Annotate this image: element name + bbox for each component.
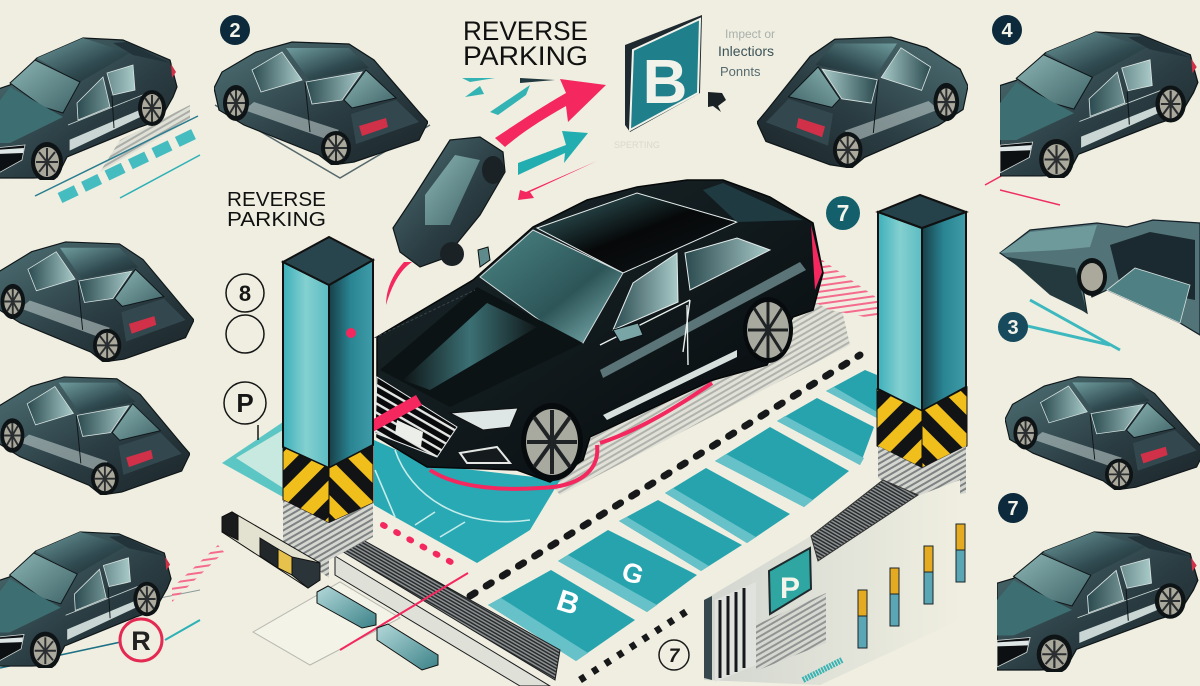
car: bottom left [0,532,171,670]
number badge 7 right [998,493,1028,523]
number badge 7 right: 7 [1007,498,1019,520]
flying small car [393,137,505,267]
red line across curb [340,573,468,650]
roof [537,193,737,273]
inspection text: Ponnts [720,64,761,79]
inspection text [718,27,775,79]
car: left second [0,242,194,362]
license plate [395,420,423,447]
teal floor [374,440,560,563]
car: top right of centre [757,37,968,168]
gate structure [704,480,960,685]
rear window [703,183,803,222]
slot lighter bands [488,387,877,661]
pink hatch behind main car [810,255,880,320]
pink underline around car [430,383,712,489]
number badge 2: 2 [229,20,241,42]
big pink arrow [495,79,606,147]
floor markings under top-left car [0,105,1120,668]
grille [375,377,457,457]
dashed thin leader [370,290,475,340]
door highlights [603,350,737,420]
option circles left [224,274,266,440]
inspection text: Inlectiors [718,43,774,59]
car: right bottom [997,532,1198,674]
car: left third [0,377,190,495]
number badge 3 [998,312,1028,342]
car: right top [1000,32,1198,180]
hood [380,287,583,407]
title top second line: PARKING [463,41,588,71]
pink tail under small car [386,262,412,305]
inspection text: Impect or [725,27,775,41]
circle letter S: 8 [239,281,251,306]
faint sketched rectangle [253,582,400,665]
number badge 7 near car [826,196,860,230]
teal arrow [518,131,588,175]
slot letter G: G [618,556,647,591]
number badge 2 [220,15,250,45]
car: top second [214,42,428,165]
dotted line bottom [580,608,692,680]
small teal sketch marks [462,78,555,115]
parking sign [625,15,702,132]
wheels [521,403,583,481]
P sign on gate: P [780,572,800,605]
windshield [480,230,623,343]
car: top left [0,38,177,182]
lower vent [460,447,510,463]
number badge 4: 4 [1001,20,1013,42]
curb left [335,540,560,686]
number badge 3: 3 [1007,317,1019,339]
number 7 floor badge [659,640,689,670]
circle letter P: P [236,388,254,418]
mirrors [613,323,643,342]
thin pink arrow [518,161,597,200]
title top: REVERSE [463,16,588,46]
pink stroke across bumper [340,395,422,447]
red circle marker: R [131,626,151,656]
bollards [858,524,965,648]
pink dots on floor [383,525,460,567]
floor arcs [375,450,530,537]
dotted line [470,355,860,596]
faded text: SPERTING [614,140,660,150]
number badge 7 near car: 7 [837,200,849,226]
car: right third [1005,377,1200,490]
P sign on gate [769,548,811,614]
ground hatch under main car [540,280,850,495]
title left: REVERSE [227,189,326,211]
teal floor tick [803,660,842,680]
pink hatch beam from bottom-left car [172,545,224,602]
main car [375,180,823,482]
car: right open doors [1000,220,1200,335]
slot letter B: B [553,584,583,622]
parking sign: B [643,48,687,117]
red circle marker [120,619,162,661]
side windows [613,253,678,330]
parking slots [488,370,877,661]
teal pad left [222,422,283,497]
small star mark [708,92,726,112]
headlight [450,408,518,430]
left pillar [283,237,373,578]
right pillar [877,195,967,503]
number 7 floor badge: 7 [669,646,681,667]
title left second line: PARKING [227,209,326,231]
barrier blocks [222,512,438,670]
number badge 4 [992,15,1022,45]
tail light edge [811,225,822,290]
